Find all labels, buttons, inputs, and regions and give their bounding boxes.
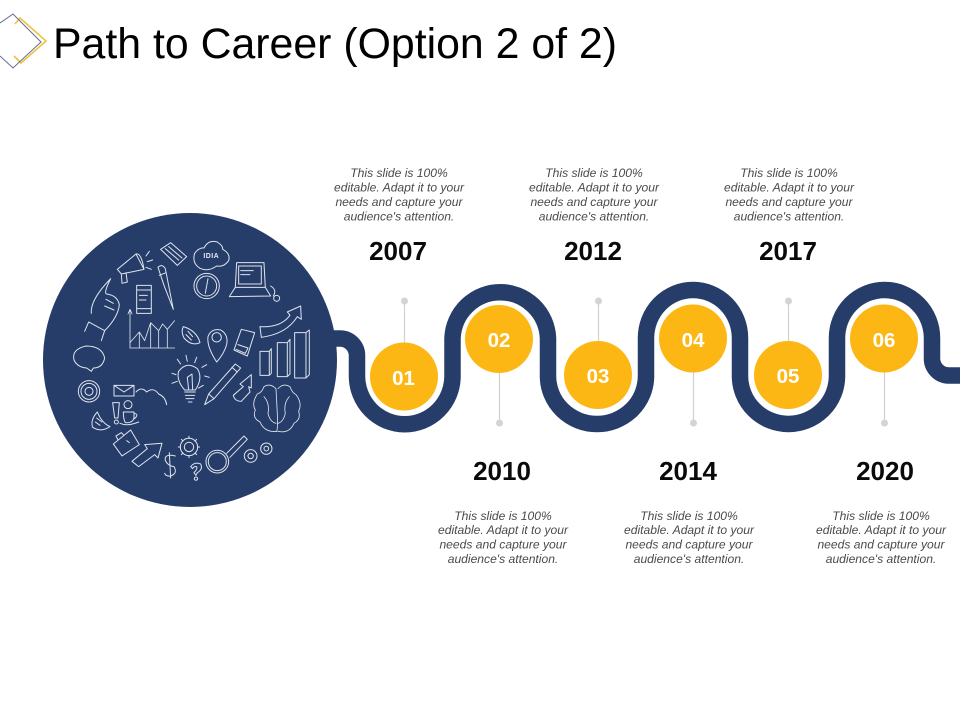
icon: euro coin [92,412,110,430]
icon: coins [244,443,272,462]
title: Path to Career (Option 2 of 2) [53,20,617,68]
icon: pointing hand [85,279,119,341]
year: 2020: 2020 [856,456,914,486]
connector: 05 [785,298,792,345]
text block: 2012: audience's attention. [539,210,649,224]
text block: 2010: editable. Adapt it to your [438,523,569,537]
node 01: 01 [392,367,415,390]
text block: 2020: needs and capture your [817,538,946,552]
text block: 2012: needs and capture your [530,195,659,209]
node 04 [659,304,727,372]
year: 2012: 2012 [564,236,622,266]
node 05: 05 [777,365,799,388]
icon: pencil [205,364,241,405]
text block: 2014: audience's attention. [634,552,744,566]
year: 2010: 2010 [473,456,531,486]
icon: magnifier [206,436,247,473]
text block: 2007: editable. Adapt it to your [334,180,465,194]
connector: 01 [401,298,408,345]
icon: notepad [161,243,187,265]
icon group: career doodles [74,241,309,480]
icon: megaphone [117,251,153,283]
connector: 06 [881,370,888,426]
text block: 2010: This slide is 100% [454,509,552,523]
node 05 [754,341,822,409]
connector: 02 [496,370,503,426]
text block: 2020: This slide is 100% [832,509,930,523]
icon: envelope [114,385,167,405]
panel: career icons circle [43,213,337,507]
node 03: 03 [587,365,609,388]
icon: speech bubble [74,346,105,371]
text block: 2012: editable. Adapt it to your [529,180,660,194]
node 03 [564,341,632,409]
icon: pen [158,266,173,309]
icon: idea cloud: IDIA [203,253,219,260]
node 06: 06 [873,329,895,352]
text block: 2007: needs and capture your [335,195,464,209]
icon: gear [178,436,200,458]
year: 2014: 2014 [659,456,717,486]
icon: brain [254,385,300,432]
text block: 2017: needs and capture your [725,195,854,209]
connector: 03 [595,298,602,345]
node 01 [370,342,438,410]
winding path [330,290,960,424]
text block: 2007: This slide is 100% [350,166,448,180]
year: 2007: 2007 [369,236,427,266]
icon: dollar [165,453,175,478]
icon: title diamonds [0,14,46,68]
node 02: 02 [488,329,510,352]
text block: 2007: audience's attention. [344,210,454,224]
icon: briefcase [113,430,139,456]
text block: 2017: editable. Adapt it to your [724,180,855,194]
icon: phone [137,285,151,313]
icon: question mark [191,463,201,480]
icon: up arrow [233,375,251,401]
icon: coffee cup [120,401,139,425]
connector: 04 [690,370,697,426]
icon: bar columns [260,330,309,378]
text block: 2014: editable. Adapt it to your [624,523,755,537]
icon: arrow [132,443,162,467]
text block: 2014: This slide is 100% [640,509,738,523]
icon: small notebook [234,329,255,356]
icon: light bulb [172,355,209,402]
icon: line chart [128,309,175,348]
text block: 2020: editable. Adapt it to your [816,523,947,537]
text block: 2010: needs and capture your [439,538,568,552]
icon: map pin [208,330,227,362]
icon: at sign [78,381,100,402]
text block: 2010: audience's attention. [448,552,558,566]
text block: 2017: This slide is 100% [740,166,838,180]
icon: laptop [229,263,280,301]
text block: 2020: audience's attention. [826,552,936,566]
year: 2017: 2017 [759,236,817,266]
icon: idea cloud [194,241,229,270]
icon: rising arrow [260,306,301,337]
node 02 [465,305,533,373]
text block: 2017: audience's attention. [734,210,844,224]
text block: 2012: This slide is 100% [545,166,643,180]
icon: compass [194,273,219,299]
text block: 2014: needs and capture your [625,538,754,552]
node 04: 04 [682,329,705,352]
icon: euro badge [182,327,200,344]
icon: exclamation mark [113,403,119,424]
node 06 [850,304,918,372]
